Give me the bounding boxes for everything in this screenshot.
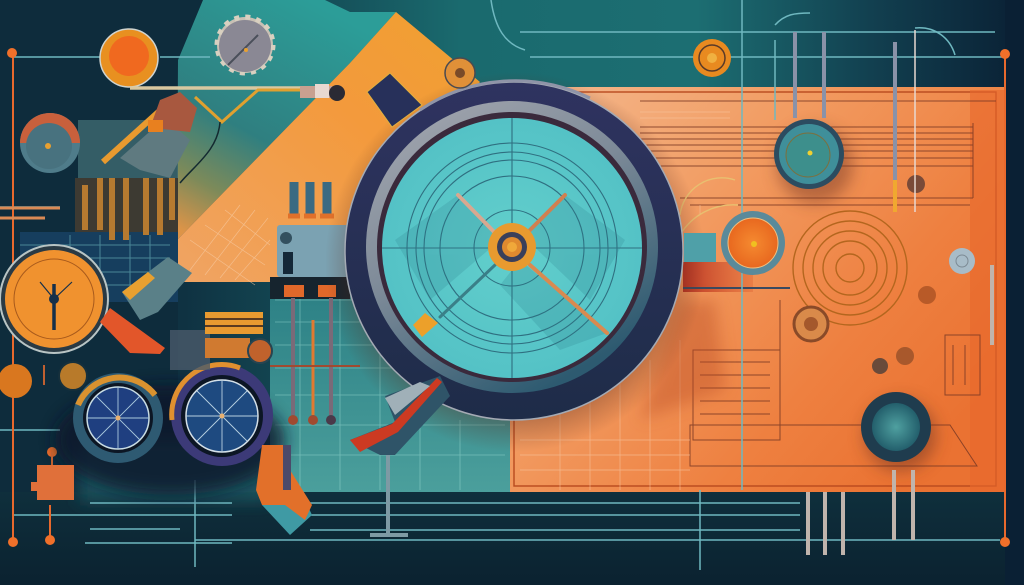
gauge: top-left orange: [100, 29, 158, 87]
left dark field: [0, 0, 203, 492]
lower left teal glow: [80, 440, 270, 500]
needles: cross: [440, 195, 607, 333]
panel: orange diamond: [177, 12, 480, 282]
wrench: dial bottom-left: [350, 376, 450, 455]
blueprint lines: right panel: [640, 101, 996, 466]
tool: top-left wrench arm: [103, 84, 345, 183]
bracket: centre-left arms: [100, 257, 272, 370]
red heat block: [683, 262, 753, 292]
panel: lower teal blueprint: [270, 282, 510, 492]
panel: top teal polygon: [177, 0, 396, 240]
component: bottom shield: [256, 445, 312, 535]
blueprint lines: lower teal: [275, 285, 505, 490]
gauges: brown knobs: [794, 175, 936, 374]
hub: [488, 223, 536, 271]
rods: upper right: [795, 32, 895, 190]
rod: orange tip: [893, 180, 897, 212]
gauges: small orange left: [0, 362, 87, 398]
shadow: teal gauge: [777, 127, 853, 203]
wheel: left: [73, 373, 163, 463]
panel: orange blueprint: [510, 87, 1005, 492]
hatch: orange diamond grid: [190, 205, 270, 285]
gauge: left clock: [0, 245, 108, 353]
gauge: teal right: [774, 119, 844, 189]
right dark strip: [1005, 0, 1024, 585]
dial: main: [345, 81, 683, 420]
gauge: teal bottom right: [861, 392, 931, 462]
rods: lower right: [808, 265, 992, 555]
shadow: bottom teal gauge: [864, 399, 936, 471]
gear: top centre: [445, 58, 475, 88]
blueprint: concentric coils: [680, 178, 907, 325]
red rod: [683, 287, 790, 289]
shadow: dial right: [640, 300, 725, 420]
gear: top: [217, 17, 273, 73]
blueprint lines: peach grid: [520, 112, 730, 490]
connector: dial right: [684, 233, 716, 262]
machinery: left columns and grid: [0, 120, 178, 302]
dial shadows: wedges: [395, 195, 625, 350]
bottom dark band: [0, 492, 1024, 585]
shadow: main dial: [325, 72, 705, 452]
tab: dial top-left: [367, 73, 422, 127]
component: bottom centre post: [370, 455, 408, 535]
shadow: lower wheels: [55, 385, 285, 495]
gauge: top small orange: [693, 39, 731, 77]
gauge: grey small: [949, 248, 975, 274]
gauge: left teal: [20, 113, 80, 173]
gauge: orange centre right: [721, 211, 785, 275]
wheel: right: [171, 364, 273, 466]
component: bottom-left box: [31, 365, 74, 500]
marker: orange tab: [413, 313, 438, 337]
rod: thin upper right: [914, 30, 916, 212]
component: control box: [270, 182, 360, 425]
